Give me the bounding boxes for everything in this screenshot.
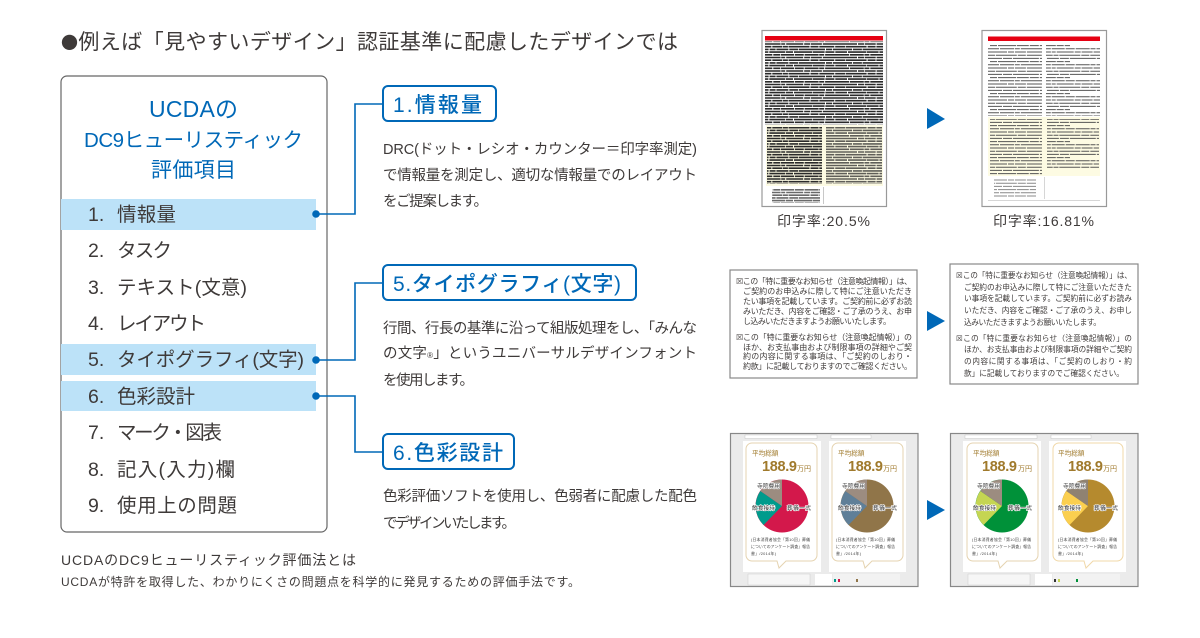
text sample after: い事項を記載しています。ご契約前に必ずお読み — [964, 293, 1132, 303]
text sample before: みいただき、内容をご確認・ご了承のうえ、お申 — [743, 306, 912, 316]
text sample after: 込みいただきますようお願いいたします。 — [964, 318, 1101, 327]
text block: 5: 行間、行長の基準に沿って組版処理をし、「みんな — [383, 320, 697, 337]
bubble card: green pie: 188.9 — [982, 459, 1017, 475]
label box: 5: 5.タイポグラフィ(文字) — [393, 273, 621, 296]
text sample before: 約款」に記載しておりますのでご確認ください。 — [743, 361, 912, 371]
text sample before: ご契約のお申込みに際して特にご注意いただき — [743, 286, 912, 296]
bubble card: green pie: 平均総額 — [973, 448, 1000, 458]
bubble card: red and teal pie — [746, 443, 817, 568]
text sample before: ☒この「特に重要なお知らせ（注意喚起情報）」の — [736, 332, 912, 343]
text sample after: ☒この「特に重要なお知らせ（注意喚起情報）」の — [956, 333, 1132, 344]
bubble card: green pie — [967, 443, 1038, 568]
document after — [982, 30, 1106, 206]
item list: 1. — [88, 204, 104, 226]
panel heading: UCDAの — [149, 96, 238, 122]
item list: 色彩設計 — [117, 386, 195, 408]
arrow 3 — [927, 500, 945, 520]
pie labels: 葬儀一式 — [787, 504, 811, 512]
source note: 書」/2014年) — [751, 551, 777, 556]
arrow 1 — [927, 108, 945, 129]
screen before — [730, 434, 918, 586]
panel heading: DC9ヒューリスティック — [84, 129, 303, 152]
arrow 2 — [927, 311, 945, 331]
text block: 1: DRC(ドット・レシオ・カウンター＝印字率測定) — [383, 141, 697, 158]
panel: evaluation items — [61, 76, 327, 532]
text sample before — [730, 270, 917, 378]
item list: 2. — [88, 240, 104, 262]
source note: についてのアンケート調査」報告 — [972, 544, 1031, 549]
item list: 8. — [88, 459, 104, 481]
bubble card: gold pie: 万円 — [1103, 465, 1117, 473]
source note — [836, 537, 895, 556]
pie labels: 葬儀一式 — [873, 504, 897, 512]
bubble card: blue-gray and brown pie: 188.9 — [848, 459, 883, 475]
pie labels: 葬儀一式 — [1008, 504, 1032, 512]
item list: 4. — [88, 313, 104, 335]
text block: 1: をご提案します。 — [383, 193, 488, 210]
source note: (日本消費者協会「第10回」葬儀 — [972, 537, 1031, 542]
footnote — [61, 552, 580, 589]
text block: 5: の文字®」というユニバーサルデザインフォント — [383, 344, 697, 362]
bubble card: blue-gray and brown pie: 万円 — [883, 465, 897, 473]
source note: (日本消費者協会「第10回」葬儀 — [1058, 537, 1117, 542]
panel heading — [84, 96, 303, 182]
bubble card: blue-gray and brown pie — [832, 443, 903, 568]
label box: 6 — [383, 434, 514, 469]
pie labels — [973, 482, 1032, 512]
source note: (日本消費者協会「第10回」葬儀 — [836, 537, 895, 542]
caption after: 印字率:16.81% — [993, 213, 1094, 229]
bubble card: red and teal pie: 188.9 — [762, 459, 797, 475]
label box: 5 — [383, 265, 636, 300]
bubble card: red and teal pie: 平均総額 — [752, 448, 779, 458]
source note: についてのアンケート調査」報告 — [751, 544, 810, 549]
connector: item 1 — [313, 104, 383, 217]
text sample after: ご契約のお申込みに際して特にご注意いただきた — [964, 282, 1132, 292]
bubble card: green pie: 万円 — [1018, 465, 1032, 473]
source note: についてのアンケート調査」報告 — [836, 544, 895, 549]
text sample after: いただき、内容をご確認・ご了承のうえ、お申し — [964, 305, 1132, 315]
text sample before: たい事項を記載しています。ご契約前に必ずお読 — [743, 296, 912, 306]
source note: についてのアンケート調査」報告 — [1058, 544, 1117, 549]
pie labels: 葬儀一式 — [1094, 504, 1118, 512]
document before — [762, 30, 886, 206]
item list: タイポグラフィ(文字) — [117, 349, 304, 371]
pie labels: 寺院費用 — [1063, 482, 1086, 490]
connector: item 5 — [313, 283, 383, 363]
item list: タスク — [117, 240, 172, 262]
pie labels: 飲食接待 — [973, 504, 996, 512]
text sample before: し込みいただきますようお願いいたします。 — [743, 317, 891, 326]
item list: 7. — [88, 422, 104, 444]
source note — [972, 537, 1031, 556]
label box: 1 — [383, 86, 496, 121]
source note: (日本消費者協会「第10回」葬儀 — [751, 537, 810, 542]
pie labels — [752, 482, 811, 512]
text block: 6: でデザインいたします。 — [383, 514, 516, 532]
text block: 5 — [383, 320, 697, 389]
source note: 書」/2014年) — [972, 551, 998, 556]
pie labels — [838, 482, 897, 512]
text block: 5: を使用します。 — [383, 372, 474, 389]
text sample before: 約の内容に関する事項は、「ご契約のしおり・ — [743, 351, 912, 361]
label box: 6: 6.色彩設計 — [393, 442, 503, 465]
text block: 6 — [383, 488, 697, 532]
panel heading: 評価項目 — [151, 159, 236, 182]
item list: レイアウト — [117, 313, 206, 335]
bubble card: gold pie: 平均総額 — [1058, 448, 1085, 458]
source note: 書」/2014年) — [836, 551, 862, 556]
item list: 6. — [88, 386, 104, 408]
bubble card: gold pie — [1053, 443, 1123, 568]
pie labels — [1058, 482, 1118, 512]
item list: 情報量 — [117, 204, 176, 226]
pie labels: 飲食接待 — [838, 504, 861, 512]
source note — [1058, 537, 1117, 556]
item list: 記入(入力)欄 — [117, 459, 235, 481]
bubble card: red and teal pie: 万円 — [797, 465, 811, 473]
caption before: 印字率:20.5% — [777, 213, 870, 229]
text sample after: ☒この「特に重要なお知らせ（注意喚起情報）」は、 — [956, 270, 1132, 281]
text sample after: の内容に関する事項は、「ご契約のしおり・約 — [964, 356, 1132, 366]
highlight bars — [61, 199, 316, 411]
source note: 書」/2014年) — [1058, 551, 1084, 556]
screen after — [950, 434, 1138, 586]
bubble card: gold pie: 188.9 — [1068, 459, 1103, 475]
pie labels: 寺院費用 — [977, 482, 1000, 490]
text sample after: ほか、お支払事由および制限事項の詳細やご契約 — [964, 344, 1132, 354]
text block: 1 — [383, 141, 697, 210]
item list: 9. — [88, 495, 104, 517]
footnote: UCDAのDC9ヒューリスティック評価法とは — [61, 552, 356, 568]
pie labels: 寺院費用 — [842, 482, 865, 490]
title: ●例えば「見やすいデザイン」認証基準に配慮したデザインでは — [61, 29, 678, 54]
footnote: UCDAが特許を取得した、わかりにくさの問題点を科学的に発見するための評価手法です。 — [61, 574, 580, 589]
pie labels: 飲食接待 — [752, 504, 775, 512]
item list: 使用上の問題 — [117, 495, 237, 517]
label box: 1: 1.情報量 — [393, 94, 482, 117]
item list: 5. — [88, 349, 104, 371]
text block: 1: で情報量を測定し、適切な情報量でのレイアウト — [383, 167, 697, 184]
text sample after: 款」に記載しておりますのでご確認ください。 — [964, 368, 1124, 378]
item list: マーク・図表 — [117, 422, 222, 444]
pie labels: 寺院費用 — [757, 482, 780, 490]
text block: 6: 色彩評価ソフトを使用し、色弱者に配慮した配色 — [383, 488, 697, 505]
item list: テキスト(文意) — [117, 277, 247, 299]
text sample after — [950, 264, 1138, 384]
item list: 3. — [88, 277, 104, 299]
item list — [88, 204, 304, 517]
text sample before: ☒この「特に重要なお知らせ（注意喚起情報）」は、 — [736, 276, 912, 287]
pie labels: 飲食接待 — [1058, 504, 1081, 512]
bubble card: blue-gray and brown pie: 平均総額 — [838, 448, 865, 458]
connector: item 6 — [313, 393, 383, 452]
text sample before: ほか、お支払事由および制限事項の詳細やご契 — [743, 342, 912, 352]
source note — [751, 537, 810, 556]
